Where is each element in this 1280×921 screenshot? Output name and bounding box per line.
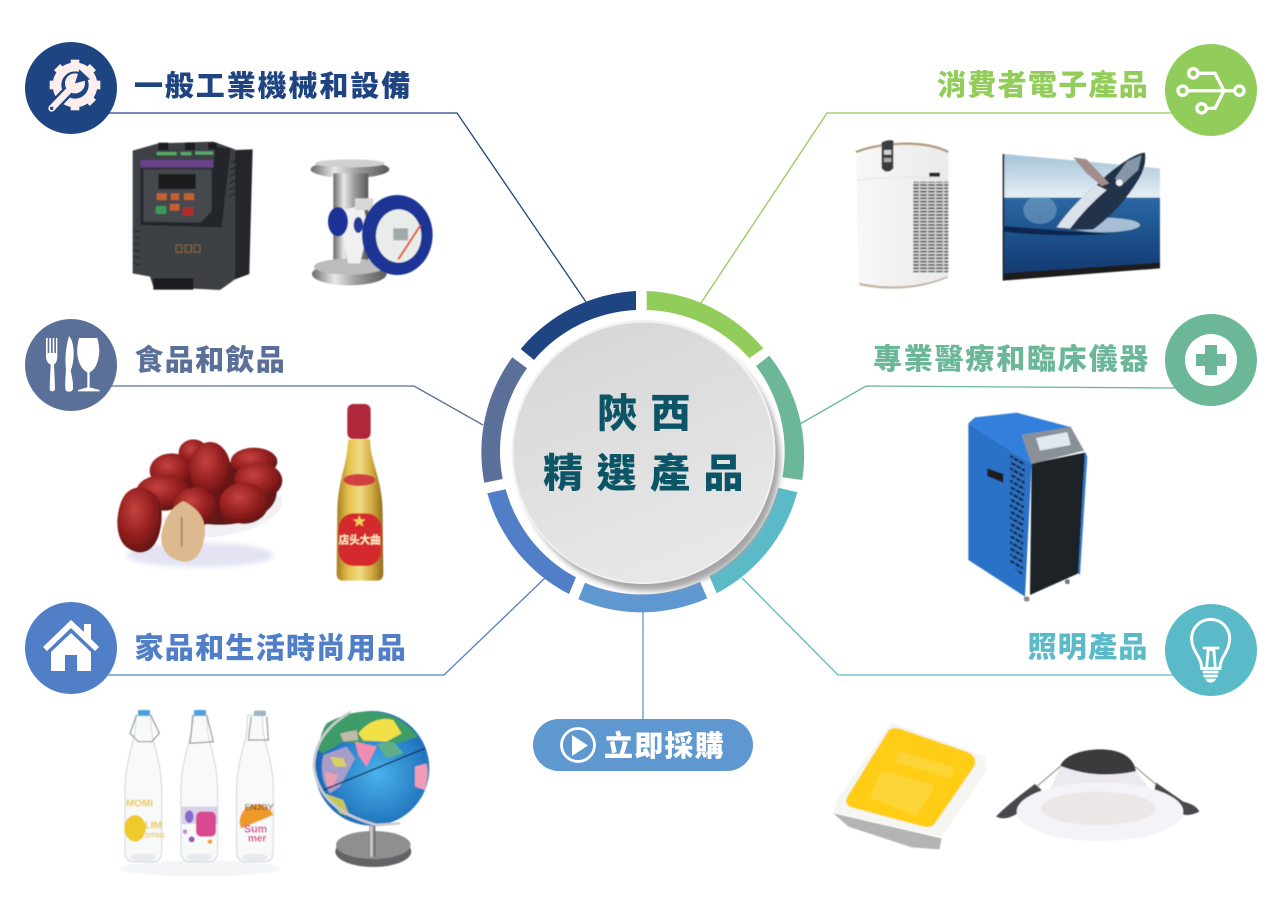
product: glass bottles: Sum [244, 823, 267, 835]
heading: home and lifestyle: 家品和生活時尚用品 [134, 631, 407, 665]
centre disk [512, 320, 780, 591]
button: buy now [533, 719, 753, 771]
connector lines [100, 113, 1175, 720]
product: liquor bottle [337, 404, 383, 581]
icon: light bulb [1165, 604, 1257, 696]
centre title [543, 392, 757, 496]
product: glass bottles: MOMI [126, 799, 153, 810]
product: blue medical device [968, 413, 1087, 601]
product: glass bottles: LIM [145, 820, 162, 831]
product: LED chip [833, 723, 987, 849]
heading: food and beverage: 食品和飲品 [134, 343, 286, 377]
product: flow meter [311, 159, 433, 285]
product: LED downlight [996, 749, 1199, 841]
product: liquor bottle: 店头大曲 [339, 533, 381, 546]
heading: lighting: 照明產品 [1028, 630, 1149, 664]
product: air purifier [856, 140, 948, 289]
icon: cutlery and glass [25, 319, 117, 411]
icon: gear and wrench [25, 42, 117, 134]
heading: general machinery: 一般工業機械和設備 [134, 70, 412, 103]
product: glass bottles: mer [248, 833, 266, 844]
icon: house [25, 602, 117, 694]
product: television with whale [1003, 153, 1160, 281]
heading: consumer electronics: 消費者電子產品 [937, 68, 1149, 102]
icon: medical plus [1165, 314, 1257, 406]
heading: medical instruments: 專業醫療和臨床儀器 [873, 342, 1150, 376]
button: buy now: 立即採購 [604, 729, 725, 763]
icon: circuit nodes [1165, 44, 1257, 136]
product: globe [314, 711, 429, 867]
product: glass bottles: ENJOY [245, 802, 274, 812]
product: red dates [117, 439, 282, 567]
product: soft starter [133, 142, 253, 290]
centre title: 精選產品 [543, 452, 757, 496]
product: glass bottles [120, 710, 280, 876]
product: glass bottles: ZITRO [145, 832, 165, 839]
centre title: 陝西 [597, 392, 704, 436]
segmented ring [481, 291, 804, 612]
